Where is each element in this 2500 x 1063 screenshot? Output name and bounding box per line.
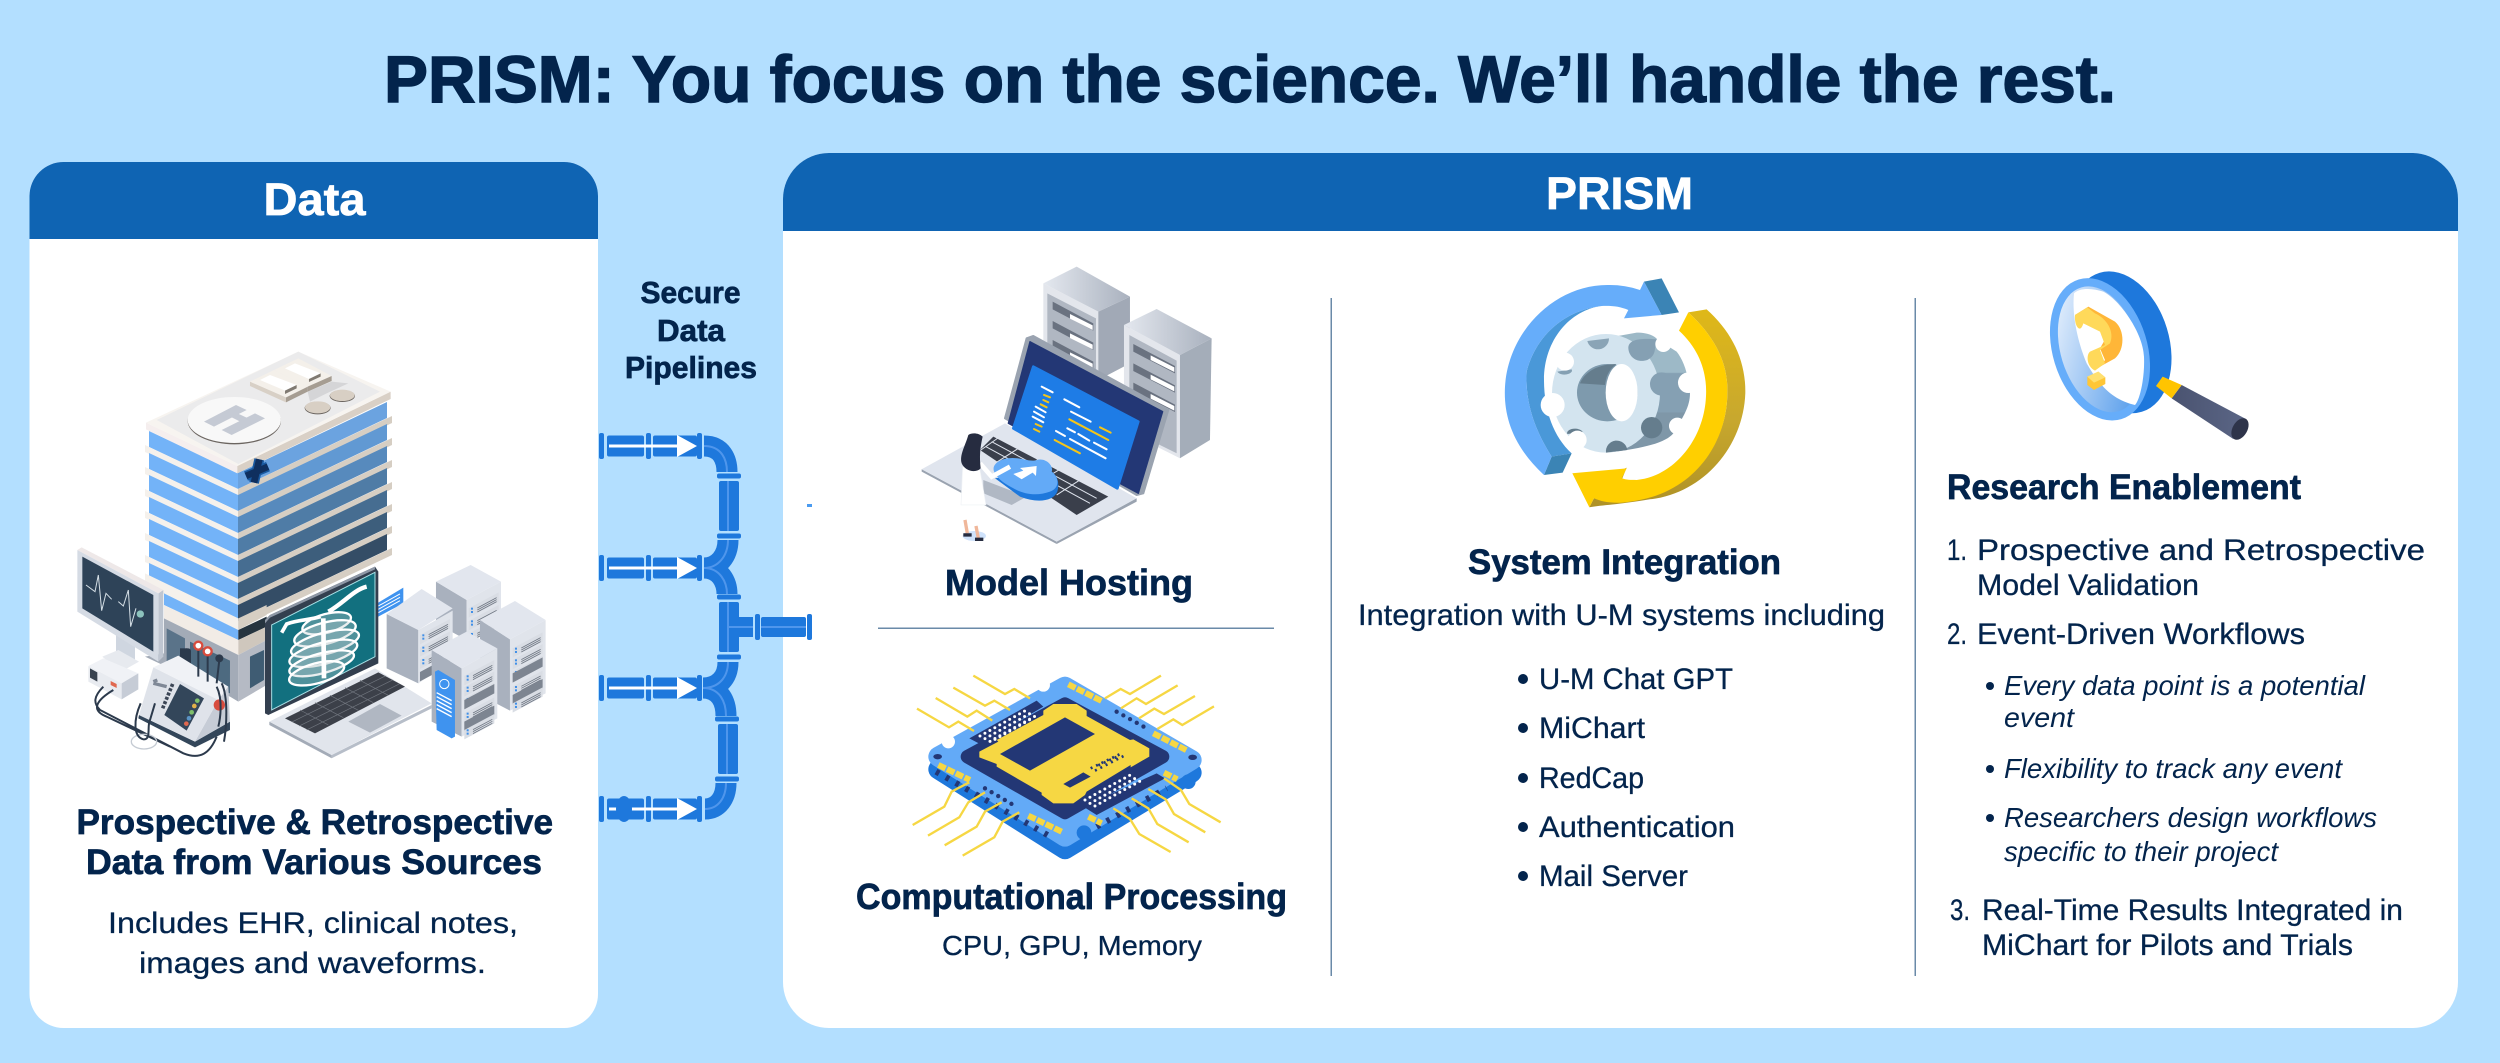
vital signs monitor — [77, 547, 163, 672]
computational processing text: CPU, GPU, Memory — [942, 930, 1202, 961]
pipeline label — [625, 275, 757, 385]
research enablement heading: Research Enablement — [1947, 468, 2301, 507]
data description text — [108, 907, 518, 980]
system integration list: RedCap — [1539, 762, 1644, 795]
pipeline label: Pipelines — [625, 350, 757, 385]
data tag — [374, 588, 403, 618]
pipe highlights — [703, 446, 806, 809]
system integration list: Mail Server — [1539, 860, 1688, 893]
research enablement list: event — [2004, 702, 2075, 733]
data heading: Data — [264, 174, 367, 225]
research enablement list: Researchers design workflows — [2004, 802, 2377, 833]
laptop base — [269, 668, 432, 758]
computational processing heading: Computational Processing — [856, 876, 1287, 917]
panel: prism — [783, 153, 2458, 1028]
research enablement list: Model Validation — [1977, 569, 2199, 602]
cables — [95, 687, 217, 756]
server rack front with blue panel — [432, 632, 497, 739]
data description heading: Prospective & Retrospective — [76, 803, 553, 842]
chip side slots — [936, 772, 1167, 838]
research enablement list: Real-Time Results Integrated in — [1982, 894, 2403, 927]
pipe elbows and junctions — [703, 446, 728, 809]
prism panel header — [783, 153, 2458, 231]
chip gold core — [979, 704, 1149, 803]
research enablement list: 2. — [1947, 618, 1967, 651]
lower floors and lobby — [145, 563, 267, 702]
chip gold pads — [938, 684, 1187, 832]
research enablement list: 1. — [1947, 534, 1967, 567]
data description heading — [76, 803, 553, 882]
question mark — [2075, 307, 2122, 390]
icon: magnifying glass with question mark — [2033, 259, 2252, 443]
icon: system integration gear — [1505, 278, 1745, 507]
hosting server racks — [1043, 267, 1212, 458]
research enablement list: 3. — [1950, 894, 1970, 927]
research enablement list: Flexibility to track any event — [2004, 753, 2343, 784]
research enablement list: MiChart for Pilots and Trials — [1982, 929, 2353, 962]
pipe inputs with arrows — [599, 433, 702, 822]
server rack right — [480, 601, 546, 713]
panel: data — [30, 162, 598, 1028]
laptop screen — [265, 567, 378, 715]
vital signs monitor and defibrillator — [77, 547, 230, 756]
system integration list — [1518, 663, 1735, 893]
laptop base — [922, 423, 1137, 544]
prism heading: PRISM — [1546, 168, 1693, 219]
data description text: Includes EHR, clinical notes, — [108, 907, 518, 940]
research enablement list: Event-Driven Workflows — [1977, 618, 2305, 651]
vertical pipes and flanges — [715, 474, 741, 782]
chip traces — [913, 676, 1221, 856]
yellow arrow — [1572, 309, 1745, 507]
data description text: images and waveforms. — [139, 947, 486, 980]
illustration: hospital, monitor and servers — [77, 352, 546, 758]
research enablement list: Every data point is a potential — [2004, 670, 2366, 701]
system integration heading: System Integration — [1468, 543, 1781, 582]
small power box — [88, 658, 138, 699]
blue arrow — [1505, 278, 1679, 475]
servers, laptop and x-ray — [265, 565, 546, 758]
server rack back — [436, 565, 501, 643]
roof — [146, 352, 391, 483]
data description heading: Data from Various Sources — [86, 843, 542, 882]
chip navy dots — [985, 712, 1147, 804]
gear — [1541, 333, 1699, 453]
pipeline label: Data — [657, 313, 726, 348]
output pipe — [738, 614, 812, 640]
pipeline label: Secure — [640, 275, 740, 310]
system integration list: U-M Chat GPT — [1539, 663, 1733, 696]
secure data pipelines diagram — [599, 433, 812, 822]
ribcage x-ray — [282, 587, 367, 690]
scientist figure — [961, 433, 1010, 541]
code lines on the screen — [1033, 387, 1111, 458]
research enablement list: specific to their project — [2004, 836, 2279, 867]
system integration list: MiChart — [1539, 712, 1646, 745]
model hosting heading: Model Hosting — [945, 562, 1193, 603]
hospital building — [145, 352, 392, 702]
magnifier handle — [2156, 377, 2252, 443]
data panel header — [30, 162, 598, 239]
icon: processor chip — [913, 676, 1221, 856]
chip contact dots — [980, 709, 1143, 806]
system integration intro: Integration with U-M systems including — [1358, 599, 1885, 632]
defibrillator device — [131, 642, 230, 749]
system integration list: Authentication — [1539, 811, 1735, 844]
title: PRISM: You focus on the science. We’ll handle the rest. — [384, 42, 2116, 116]
upload cloud — [994, 458, 1058, 501]
research enablement list: Prospective and Retrospective — [1977, 534, 2425, 567]
research enablement list — [1947, 534, 2425, 962]
icon: model hosting laptop — [922, 267, 1212, 544]
laptop lid — [1005, 336, 1168, 495]
server rack left — [387, 589, 453, 683]
